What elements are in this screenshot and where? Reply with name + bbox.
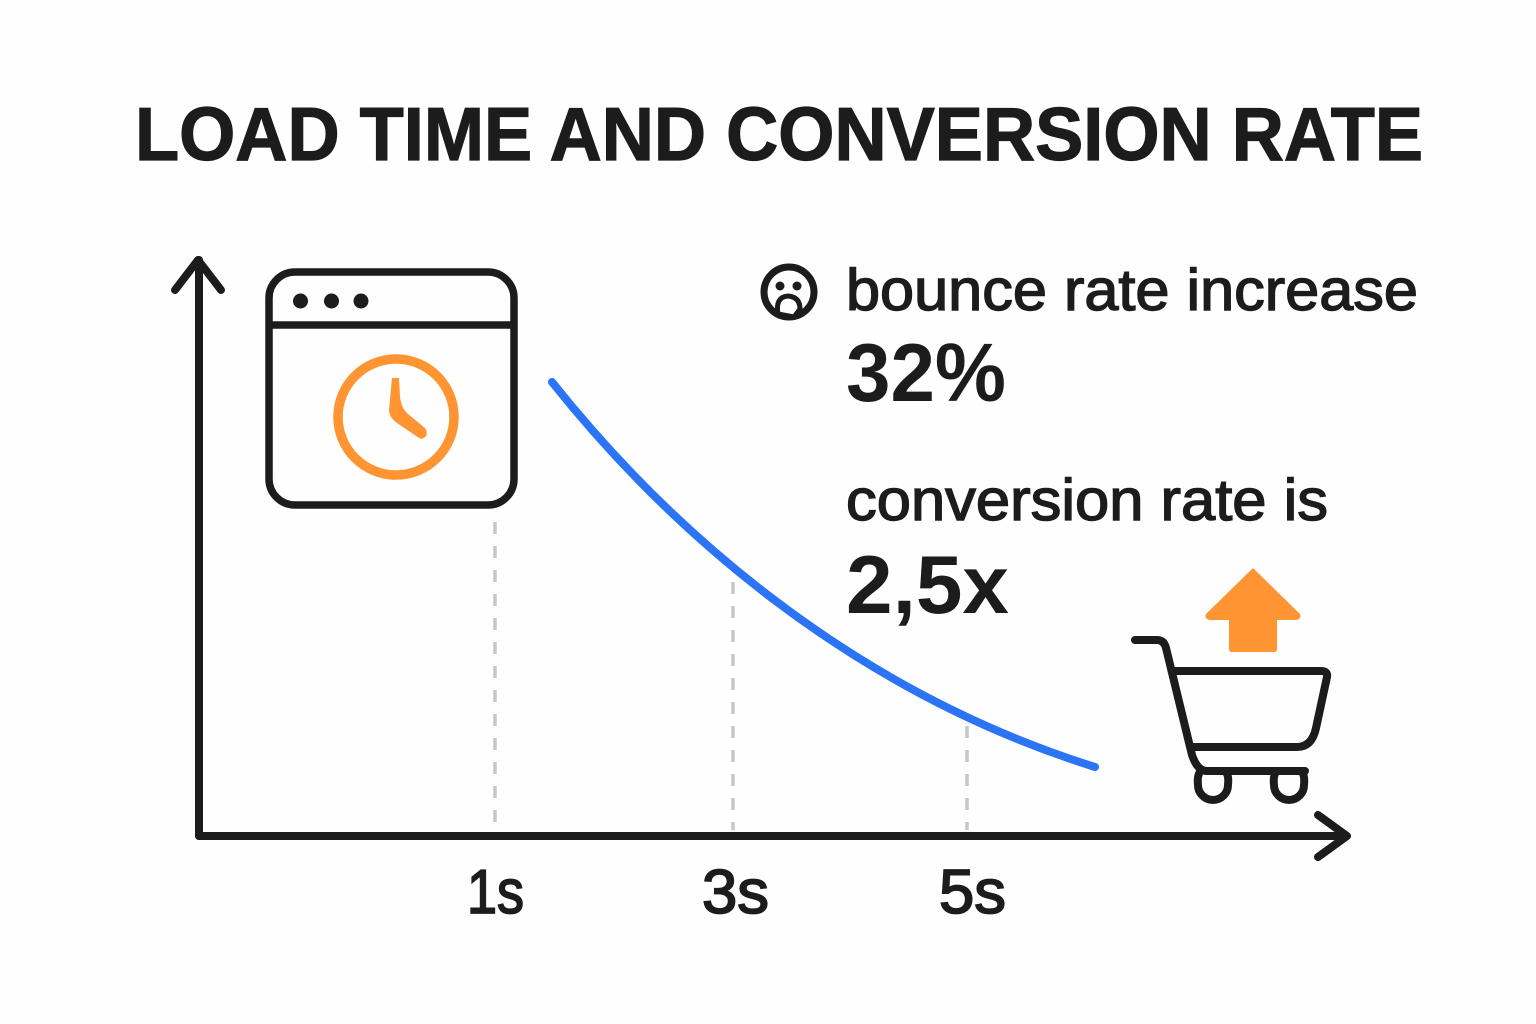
stat: 32%: 32% <box>846 326 1006 419</box>
guide line: 5s <box>965 726 969 830</box>
axis label: 1s: 1s <box>467 858 524 927</box>
text: bounce rate increase: bounce rate increase <box>846 258 1418 323</box>
title: LOAD TIME AND CONVERSION RATE <box>135 92 1423 176</box>
guide line: 3s <box>731 582 735 830</box>
icon: shocked face <box>764 267 814 317</box>
icon: up arrow <box>1206 568 1300 652</box>
chart: load time vs conversion <box>175 260 1347 927</box>
axis label: 5s: 5s <box>939 858 1006 927</box>
guide line: 1s <box>493 522 497 830</box>
icon: shopping cart <box>1135 640 1327 800</box>
axis label: 3s: 3s <box>702 858 769 927</box>
axes with arrows <box>175 260 1347 857</box>
conversion curve <box>552 382 1095 767</box>
text: conversion rate is: conversion rate is <box>846 468 1328 533</box>
stat: 2,5x: 2,5x <box>846 538 1009 631</box>
icon: browser window with clock <box>269 272 514 505</box>
